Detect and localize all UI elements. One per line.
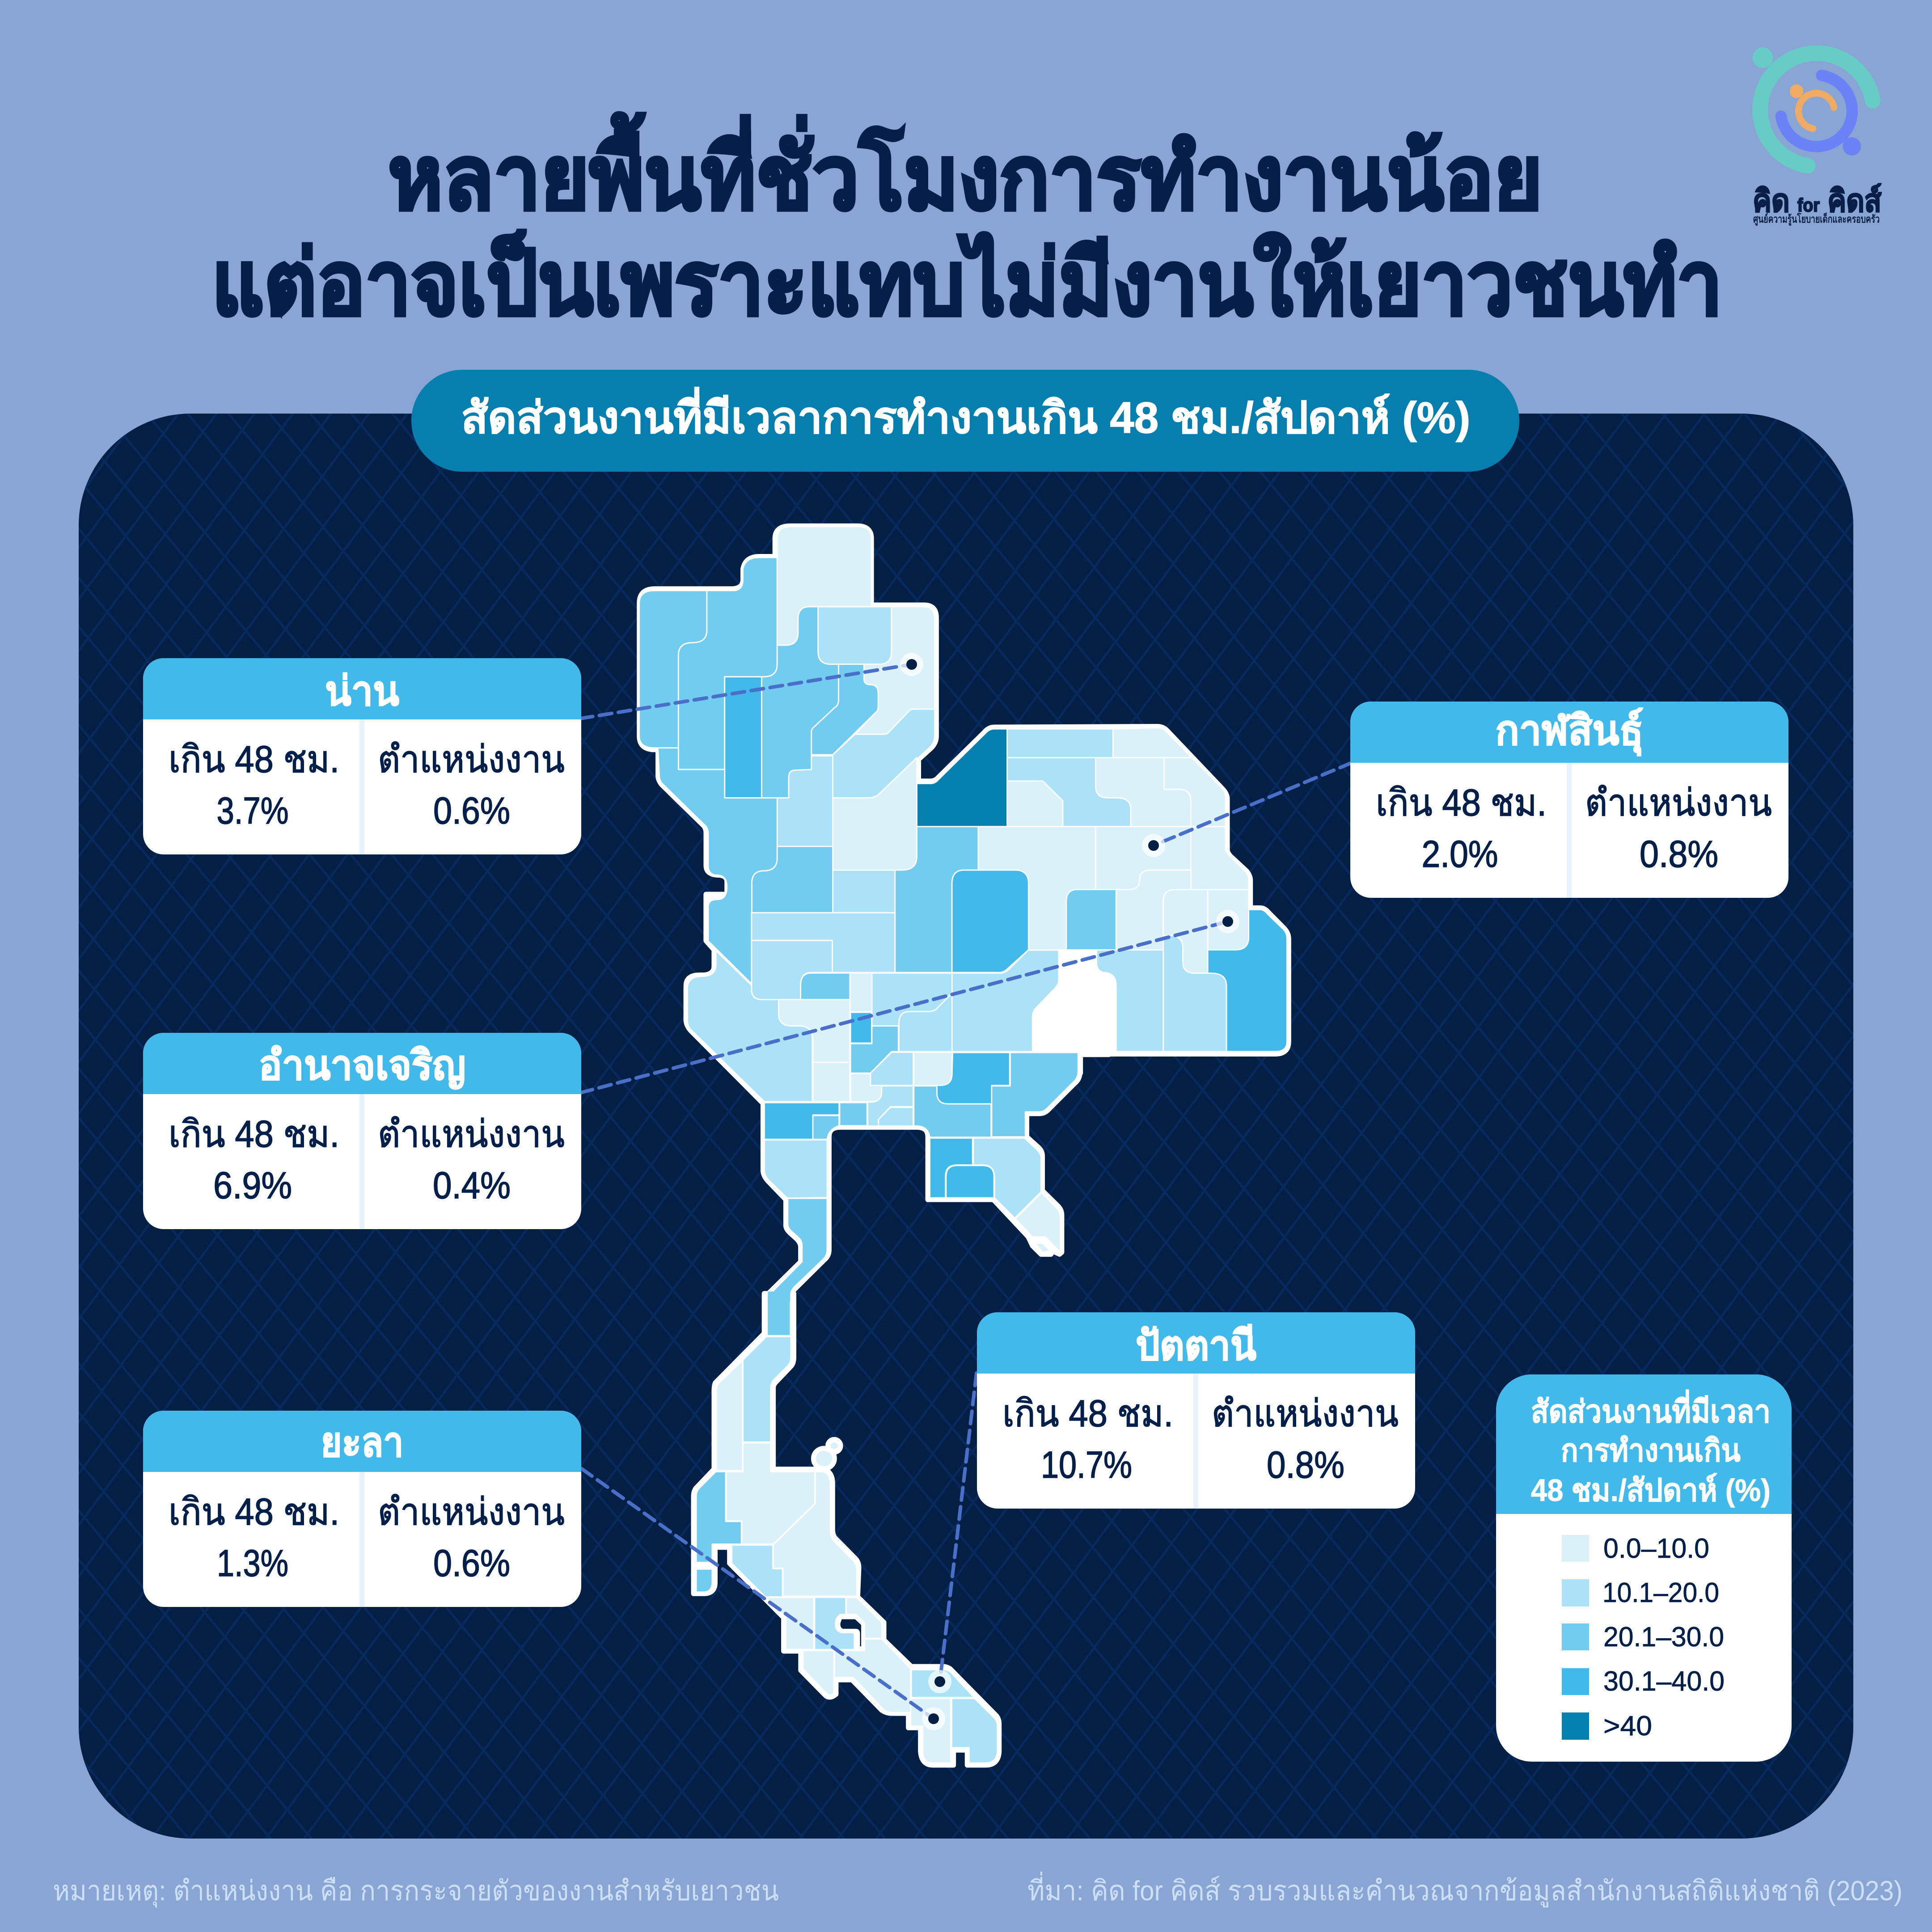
callout: Pattani: ตำแหน่งงาน xyxy=(1212,1392,1399,1434)
callout: Kalasin: ตำแหน่งงาน xyxy=(1585,782,1772,824)
callout: Amnat Charoen: 6.9% xyxy=(213,1164,292,1206)
legend item >40 xyxy=(1562,1711,1652,1742)
callout: Amnat Charoen: 0.4% xyxy=(433,1164,511,1206)
callout: Amnat Charoen: อำนาจเจริญ xyxy=(258,1043,466,1090)
legend item 30-40: 30.1–40.0 xyxy=(1603,1666,1725,1697)
marker: Kalasin xyxy=(1142,834,1165,857)
provinces: lower central and east xyxy=(687,913,1078,1297)
callout: Pattani: 10.7% xyxy=(1041,1444,1132,1486)
leader line: Amnat Charoen xyxy=(580,922,1228,1093)
callout: Yala: ยะลา xyxy=(321,1420,403,1465)
callout: Pattani xyxy=(977,1312,1415,1509)
legend xyxy=(1496,1374,1792,1762)
provinces: north, central and northeast xyxy=(639,527,1287,1052)
legend item >40: >40 xyxy=(1603,1711,1652,1742)
callout: Yala: ตำแหน่งงาน xyxy=(378,1491,565,1533)
panel: map background xyxy=(79,414,1853,1839)
logo icon: concentric arcs xyxy=(1753,47,1873,166)
legend heading: 48 ชม./สัปดาห์ (%) xyxy=(1531,1473,1771,1508)
leader line: Yala xyxy=(582,1469,934,1719)
callout: Yala: 0.6% xyxy=(433,1542,510,1584)
subtitle pill xyxy=(411,370,1519,472)
marker: Yala xyxy=(922,1707,945,1730)
source: ที่มา: คิด for คิดส์ รวบรวมและคำนวณจากข้อมูลสำนักงานสถิติแห่งชาติ (2023) xyxy=(1027,1872,1902,1907)
callout: Nan: เกิน 48 ชม. xyxy=(169,738,339,780)
title: แต่อาจเป็นเพราะแทบไม่มีงานให้เยาวชนทำ xyxy=(212,230,1722,334)
marker: Amnat Charoen xyxy=(1216,910,1239,933)
logo xyxy=(1753,47,1881,226)
callout: Nan: 3.7% xyxy=(216,790,289,832)
map of Thailand xyxy=(639,526,1289,1765)
marker: Nan xyxy=(900,653,923,676)
callout: Nan: ตำแหน่งงาน xyxy=(378,738,565,780)
leader line: Pattani xyxy=(940,1373,977,1682)
logo wordmark: คิด for คิดส์ xyxy=(1753,183,1881,218)
callout: Pattani: เกิน 48 ชม. xyxy=(1002,1392,1173,1434)
callout: Kalasin xyxy=(1350,702,1788,898)
callout: Nan: 0.6% xyxy=(433,790,510,832)
title: หลายพื้นที่ชั่วโมงการทำงานน้อย xyxy=(388,112,1543,228)
callout: Pattani: ปัตตานี xyxy=(1136,1323,1256,1369)
logo subtitle: ศูนย์ความรู้นโยบายเด็กและครอบครัว xyxy=(1753,212,1880,226)
leader line: Nan xyxy=(580,664,912,719)
callout: Yala xyxy=(143,1411,581,1607)
subtitle pill: สัดส่วนงานที่มีเวลาการทำงานเกิน 48 ชม./สัปดาห์ (%) xyxy=(461,387,1470,442)
callout: Amnat Charoen xyxy=(143,1033,581,1229)
leader line: Kalasin xyxy=(1154,763,1352,846)
callout: Kalasin: กาฬสินธุ์ xyxy=(1495,707,1644,756)
legend heading: สัดส่วนงานที่มีเวลา xyxy=(1531,1389,1771,1429)
callout: Nan xyxy=(143,658,581,854)
footnote: หมายเหตุ: ตำแหน่งงาน คือ การกระจายตัวของงานสำหรับเยาวชน xyxy=(53,1876,779,1907)
callout: Amnat Charoen: เกิน 48 ชม. xyxy=(169,1113,339,1155)
provinces: south xyxy=(696,1292,998,1763)
callout: Kalasin: 2.0% xyxy=(1422,833,1498,875)
legend item 0-10: 0.0–10.0 xyxy=(1603,1533,1709,1564)
callout: Amnat Charoen: ตำแหน่งงาน xyxy=(378,1113,565,1155)
callout: Kalasin: 0.8% xyxy=(1640,833,1718,875)
legend heading: การทำงานเกิน xyxy=(1561,1433,1741,1468)
marker: Pattani xyxy=(928,1670,951,1693)
legend item 10-20: 10.1–20.0 xyxy=(1602,1577,1719,1608)
legend item 20-30: 20.1–30.0 xyxy=(1603,1622,1724,1653)
callout: Yala: 1.3% xyxy=(217,1542,288,1584)
title xyxy=(212,112,1722,334)
callout: Nan: น่าน xyxy=(325,668,399,714)
callout: Pattani: 0.8% xyxy=(1267,1444,1344,1486)
callout: Yala: เกิน 48 ชม. xyxy=(169,1491,339,1533)
map outline xyxy=(639,526,1289,1765)
callout: Kalasin: เกิน 48 ชม. xyxy=(1376,782,1547,824)
legend heading xyxy=(1531,1389,1771,1508)
